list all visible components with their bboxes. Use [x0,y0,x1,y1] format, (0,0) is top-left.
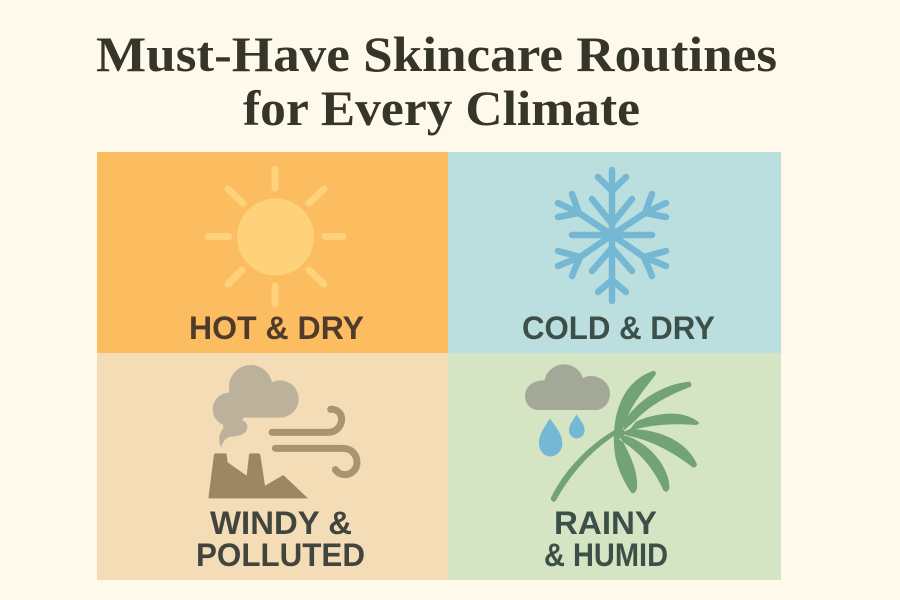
icon: factory, smoke and wind [208,365,357,498]
label: rainy and humid [544,505,668,573]
label: windy and polluted: WINDY & [210,505,352,541]
palm leaf [551,371,699,502]
smoke cloud [213,365,299,448]
label: windy and polluted: POLLUTED [196,537,365,573]
label: rainy and humid: & HUMID [544,537,668,573]
panel: hot and dry [97,152,448,353]
wind lines [272,409,357,475]
icon: rain cloud and palm leaf [525,364,699,502]
panel: rainy and humid [448,353,781,580]
label: cold and dry: COLD & DRY [522,310,715,346]
title [96,26,777,136]
icon: snowflake [558,170,666,301]
label: hot and dry: HOT & DRY [189,310,364,346]
rain cloud [525,364,610,410]
rain drops [539,414,585,456]
title: Must-Have Skincare Routines [96,26,777,82]
title: for Every Climate [243,80,640,136]
factory [208,453,308,498]
panel: windy and polluted [97,353,448,580]
label: rainy and humid: RAINY [554,505,657,541]
label: windy and polluted [196,505,365,573]
panel: cold and dry [448,152,781,353]
icon: sun [208,169,343,304]
